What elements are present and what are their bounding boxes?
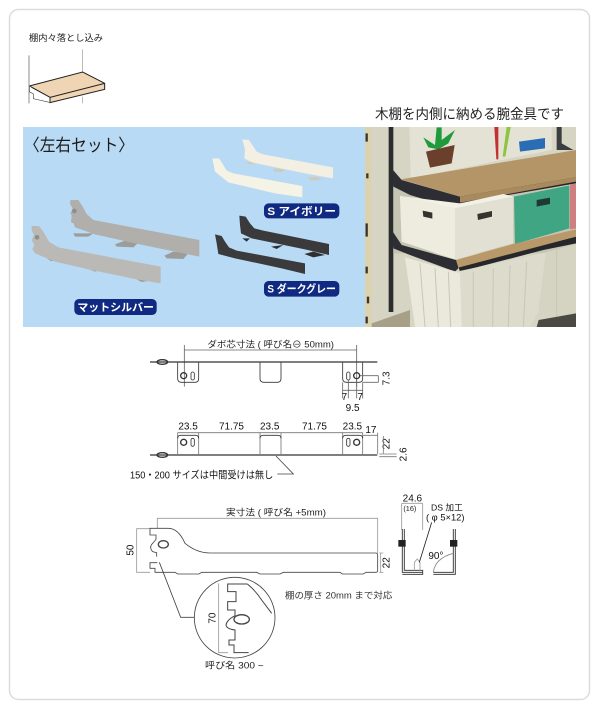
dimension: width 24.6: 24.6 — [403, 494, 423, 505]
dimension: width 24.6 — [402, 494, 423, 530]
dimensions: tab widths: 23.5 — [343, 422, 363, 433]
callout: no middle support: 150・200 サイズは中間受けは無し — [130, 469, 273, 482]
dimension: actual length: 実寸法 ( 呼び名 +5mm) — [226, 507, 326, 518]
upper shelf board — [401, 150, 576, 197]
heading: left and right set: 〈左右セット〉 — [24, 136, 134, 155]
dimensions: hole spacing: 9.5 — [346, 403, 360, 414]
dimensions: tab widths: 71.75 — [219, 422, 244, 433]
detail callout: slot enlargement: 70 — [208, 612, 219, 624]
upper bracket — [392, 168, 460, 208]
heading: photo caption: 木棚を内側に納める腕金具です — [375, 106, 564, 122]
label: S dark grey: S ダークグレー — [267, 283, 336, 296]
icon: shelf between uprights — [29, 49, 105, 103]
upper section background — [393, 187, 576, 253]
dimensions: tab widths: 2.6 — [399, 447, 410, 461]
dimension: dowel pitch — [184, 338, 357, 387]
large white bins — [540, 244, 576, 320]
dimensions: tab widths: 23.5 — [260, 422, 280, 433]
bracket profile: 22 — [382, 557, 393, 568]
U-shaped profile right — [433, 529, 457, 574]
dimensions: hole spacing: 7.3 — [382, 371, 393, 385]
diagram: front view of bracket pair — [398, 494, 464, 574]
note: shelf thickness: 棚の厚さ 20mm まで対応 — [285, 589, 392, 600]
panel: colour variations — [23, 127, 365, 327]
dimension: width 24.6: (16) — [403, 504, 416, 513]
side view bar with tabs — [150, 433, 397, 457]
bracket profile — [150, 528, 393, 574]
green box — [514, 185, 569, 244]
lower shelf board — [456, 229, 576, 268]
label: S ivory — [264, 203, 339, 218]
U-shaped profile left — [398, 529, 423, 574]
label: DS machining — [419, 502, 464, 562]
product: matte silver brackets — [32, 200, 199, 283]
dimension: actual length — [157, 507, 378, 553]
diagram: side profile of bracket — [125, 507, 393, 671]
dimensions: hole spacing: 7 — [357, 392, 363, 403]
callout: no middle support — [130, 456, 293, 482]
dimensions: tab widths: 17 — [365, 425, 377, 436]
label: matte silver — [74, 299, 157, 315]
dimensions: tab widths: 71.75 — [302, 422, 327, 433]
lower bracket — [392, 230, 458, 272]
product: dark grey brackets — [215, 216, 329, 274]
dimension: height 50: 50 — [125, 544, 136, 556]
dimension: dowel pitch: ダボ芯寸法 ( 呼び名⊖ 50mm) — [207, 338, 334, 349]
dimensions: hole spacing: 7 — [342, 392, 348, 403]
label: nominal size 300 and up: 呼び名 300 ~ — [205, 660, 264, 671]
label: S ivory: S アイボリー — [267, 206, 336, 218]
angle: 90 degrees: 90° — [428, 551, 443, 562]
product: ivory brackets — [212, 139, 333, 197]
label: matte silver: マットシルバー — [77, 302, 154, 314]
heading: installation type: 棚内々落とし込み — [29, 32, 103, 43]
dimensions: hole spacing — [342, 371, 393, 414]
dimensions: tab widths: 23.5 — [178, 422, 198, 433]
diagram: top view of bracket — [130, 338, 410, 482]
dimensions: tab widths: 22 — [382, 438, 393, 449]
white box — [400, 196, 513, 259]
detail callout: slot enlargement — [159, 562, 275, 658]
label: DS machining: ( φ 5×12) — [426, 512, 464, 522]
dimensions: tab widths — [178, 422, 410, 461]
label: DS machining: DS 加工 — [431, 502, 463, 512]
top bar with tabs — [150, 360, 377, 382]
photo: shelf in use — [365, 127, 576, 327]
dimension: height 50 — [125, 529, 150, 572]
